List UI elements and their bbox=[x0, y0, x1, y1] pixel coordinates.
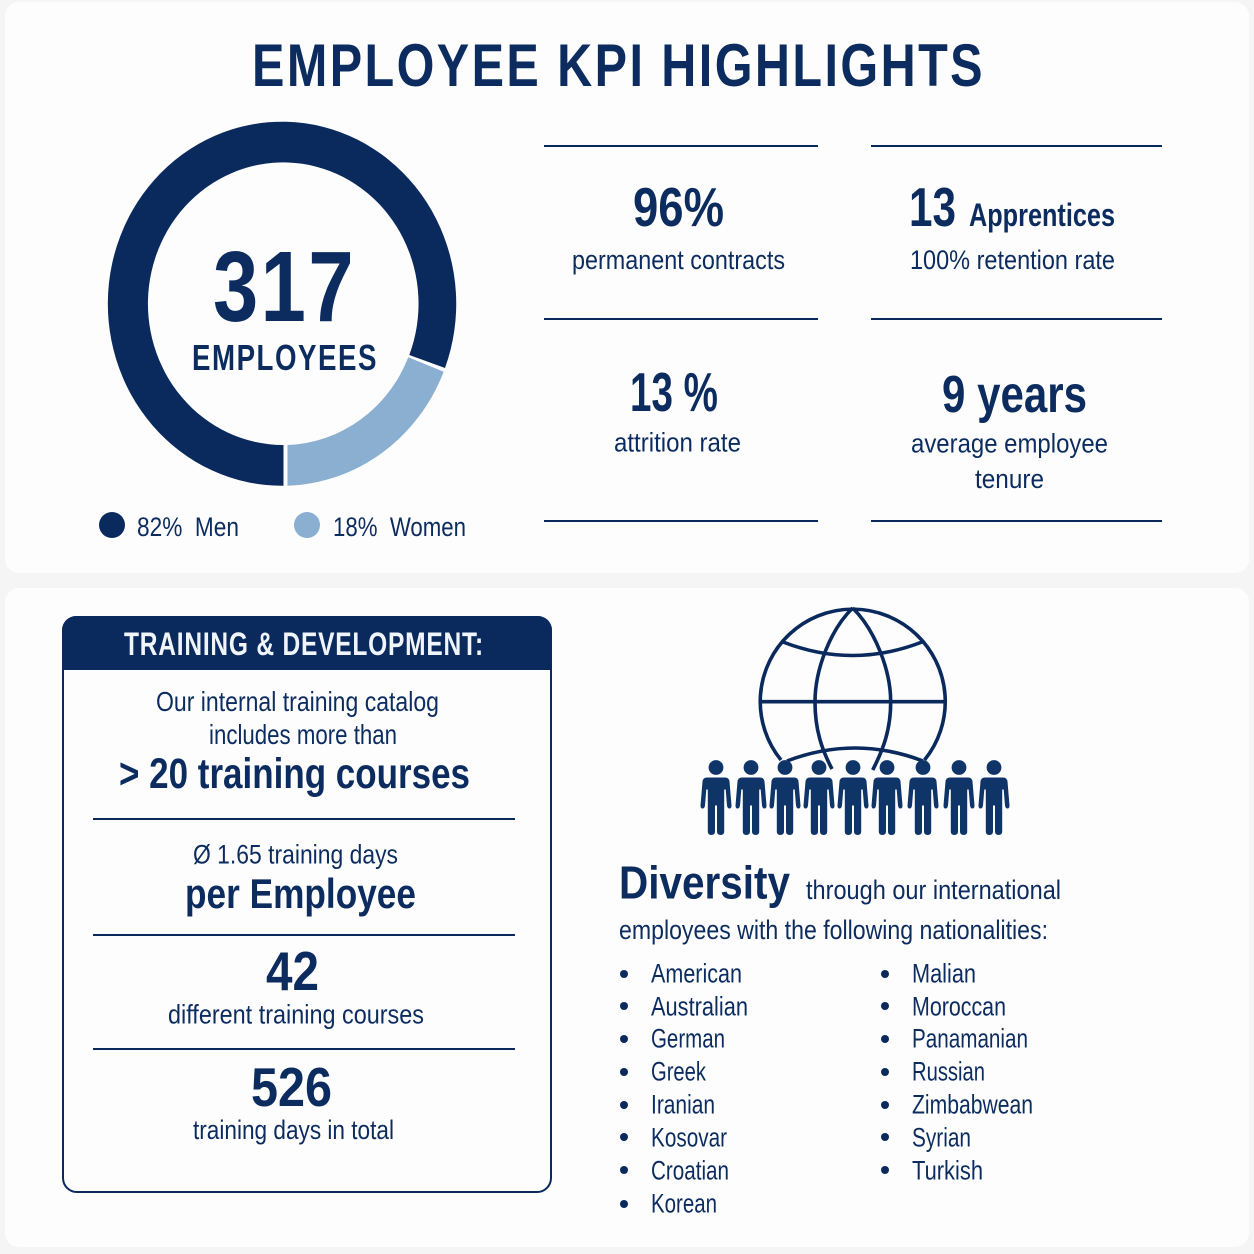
training days per employee bbox=[185, 840, 416, 917]
stat: attrition rate: attrition rate bbox=[614, 428, 741, 458]
training catalog text: includes more than bbox=[209, 719, 397, 750]
list: nationalities right column: Panamanian bbox=[912, 1024, 1028, 1054]
stat: attrition rate: 13 % bbox=[630, 361, 718, 423]
icon: globe bbox=[760, 608, 945, 770]
stat: average tenure: 9 years bbox=[942, 366, 1087, 424]
different training courses: 42 bbox=[266, 940, 319, 1002]
legend: women bbox=[294, 512, 466, 542]
list: nationalities right column: Russian bbox=[912, 1056, 985, 1086]
list: nationalities left column: American bbox=[651, 958, 742, 988]
diversity intro text: Diversity bbox=[619, 856, 790, 908]
diversity intro text bbox=[619, 856, 1061, 945]
stat: permanent contracts: permanent contracts bbox=[572, 245, 785, 275]
donut label: employees: EMPLOYEES bbox=[192, 337, 378, 378]
list: nationalities left column: Greek bbox=[651, 1056, 706, 1086]
list: nationalities left column: Korean bbox=[651, 1188, 717, 1218]
legend: women: 18% Women bbox=[333, 512, 466, 542]
stat: apprentices: 13 bbox=[909, 176, 956, 238]
total training days: 526 bbox=[251, 1056, 332, 1118]
stat: apprentices: Apprentices bbox=[969, 197, 1115, 233]
list: nationalities left column: Iranian bbox=[651, 1090, 715, 1120]
list: nationalities right column: Moroccan bbox=[912, 992, 1006, 1022]
list: nationalities right column: Zimbabwean bbox=[912, 1090, 1033, 1120]
diversity intro text: employees with the following nationalities: bbox=[619, 915, 1048, 945]
training header bar bbox=[62, 616, 552, 670]
training catalog text: Our internal training catalog bbox=[156, 686, 439, 717]
total training days: training days in total bbox=[193, 1115, 394, 1145]
training catalog text: > 20 training courses bbox=[119, 750, 470, 798]
list: nationalities left column: Croatian bbox=[651, 1156, 729, 1186]
legend: men: 82% Men bbox=[137, 512, 239, 542]
stat: permanent contracts bbox=[572, 176, 785, 275]
stat: average tenure: tenure bbox=[975, 464, 1044, 494]
donut segment: men 82% bbox=[108, 122, 456, 486]
stat: permanent contracts: 96% bbox=[633, 176, 724, 238]
total training days bbox=[193, 1056, 394, 1145]
diversity intro text: through our international bbox=[806, 875, 1061, 905]
panel: training and development bbox=[62, 616, 552, 1192]
donut total: 317: 317 bbox=[213, 231, 356, 343]
icon: globe with people bbox=[700, 608, 1010, 835]
stat: apprentices: 100% retention rate bbox=[910, 245, 1115, 275]
donut chart: gender split bbox=[108, 122, 456, 486]
donut segment: women 18% bbox=[288, 357, 444, 486]
stat: apprentices bbox=[909, 176, 1115, 275]
training days per employee: Ø 1.65 training days bbox=[193, 840, 398, 870]
list: nationalities right column bbox=[881, 958, 1033, 1186]
title: EMPLOYEE KPI HIGHLIGHTS bbox=[252, 32, 985, 99]
panel: workforce overview bbox=[5, 2, 1249, 573]
different training courses bbox=[168, 940, 424, 1030]
training catalog text bbox=[119, 686, 470, 798]
stat: average tenure bbox=[911, 366, 1108, 494]
list: nationalities left column bbox=[620, 958, 748, 1218]
list: nationalities right column: Malian bbox=[912, 958, 976, 988]
training heading: TRAINING & DEVELOPMENT: bbox=[124, 626, 484, 662]
stat: attrition rate bbox=[614, 361, 741, 458]
icon: row of people bbox=[700, 760, 1010, 835]
legend: men bbox=[99, 512, 239, 542]
different training courses: different training courses bbox=[168, 1000, 424, 1030]
stat: average tenure: average employee bbox=[911, 428, 1108, 458]
panel: training and diversity bbox=[5, 588, 1249, 1247]
list: nationalities right column: Turkish bbox=[912, 1156, 983, 1186]
list: nationalities right column: Syrian bbox=[912, 1122, 971, 1152]
training days per employee: per Employee bbox=[185, 870, 416, 917]
list: nationalities left column: Kosovar bbox=[651, 1122, 727, 1152]
list: nationalities left column: Australian bbox=[651, 992, 748, 1022]
list: nationalities left column: German bbox=[651, 1024, 725, 1054]
